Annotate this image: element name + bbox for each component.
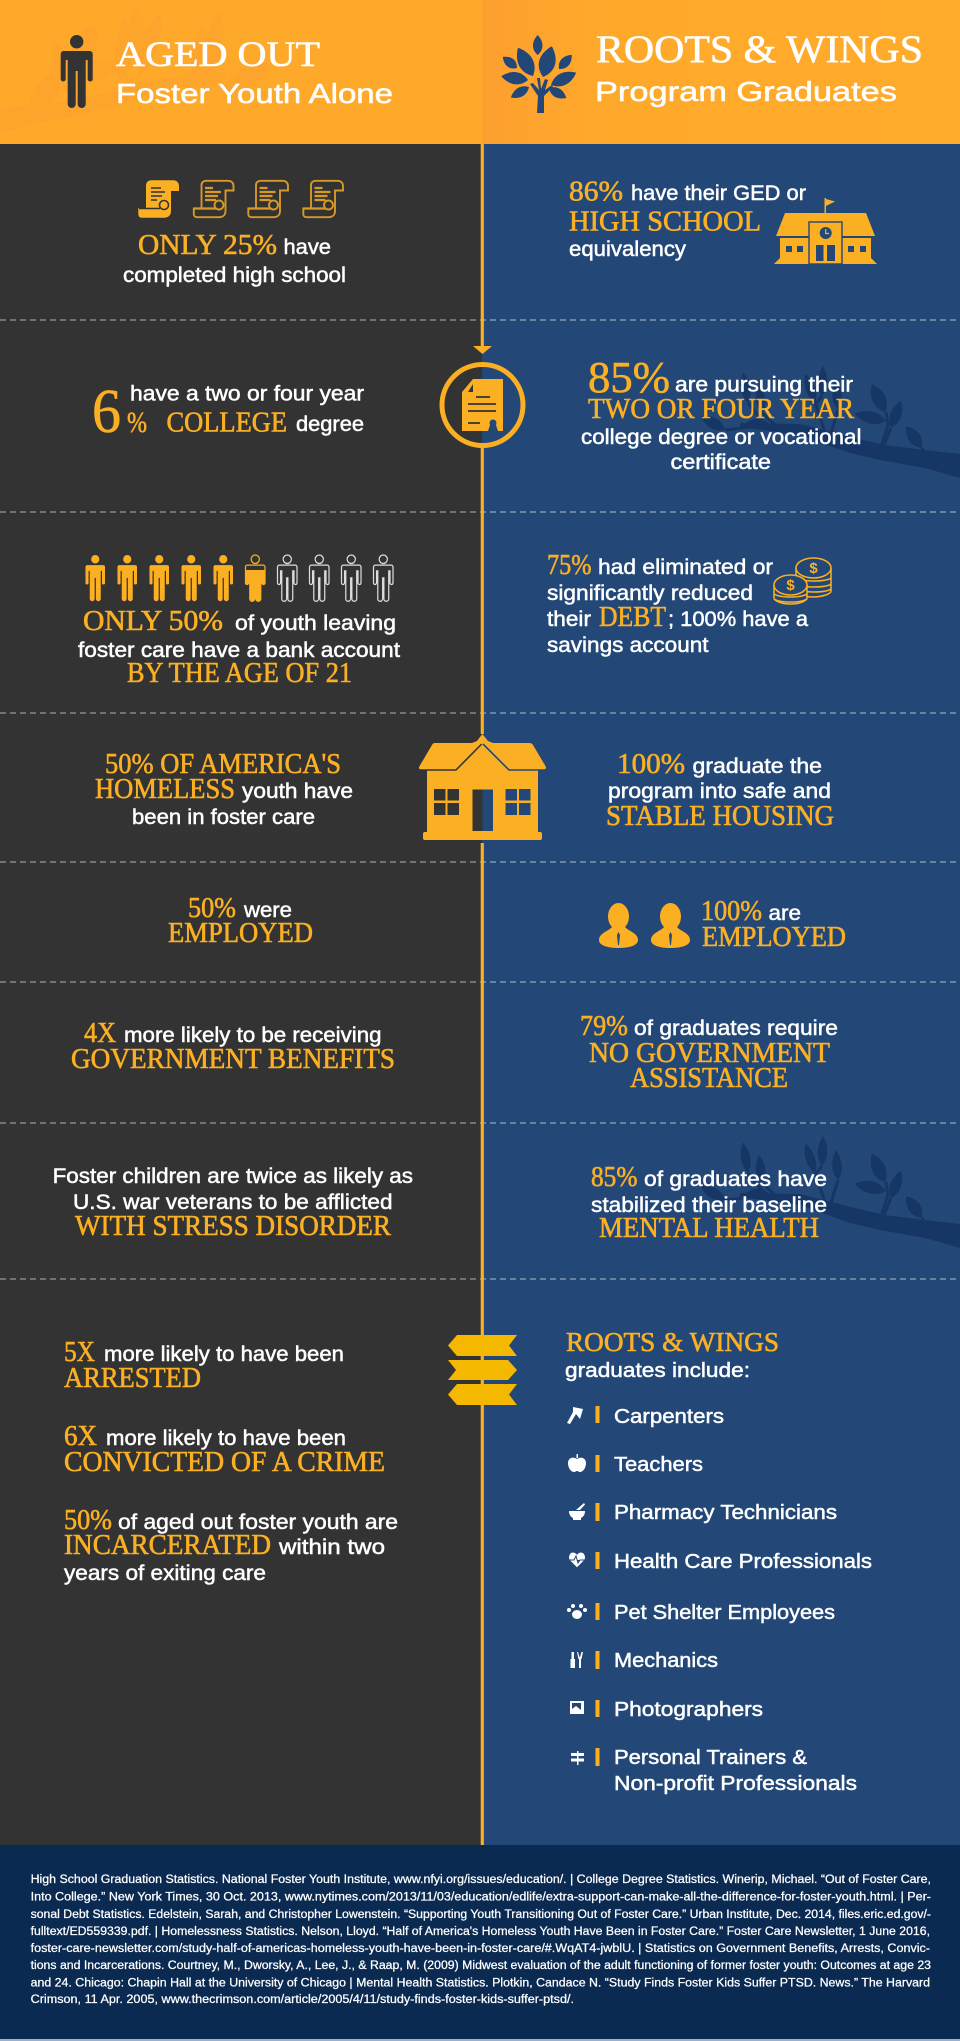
list text: Health Care Professionals [614, 1550, 872, 1573]
text: 50% incarcerated: 50% [64, 1505, 112, 1536]
footer: sources text: foster-care-newsletter.com/study-half-of-americas-homeless-youth-have-been-in-foster-care/#.WqAT4-jwblU. | Statistics on Government Benefits, Arrests, Convic- [31, 1943, 930, 1955]
text: 50% incarcerated: within two [278, 1536, 385, 1559]
text: 100% employed: EMPLOYED [702, 922, 846, 953]
icon: coin stacks [774, 558, 831, 604]
text: 85% mental health: MENTAL HEALTH [599, 1213, 819, 1244]
text: 6% college degree: have a two or four year [130, 382, 364, 406]
dashed dividers [0, 320, 960, 1279]
text: only 25% completed high school: ONLY 25% [138, 230, 277, 261]
footer: sources text: High School Graduation Statistics. National Foster Youth Institute, www.nfyi.org/issues/education/. | College Degree Statistics. Winerip, Michael. “Out of Foster Care, [31, 1874, 931, 1886]
text: 50% incarcerated: INCARCERATED [64, 1530, 271, 1561]
text: 75% eliminated debt: savings account [547, 634, 709, 657]
list text: Mechanics [614, 1649, 718, 1672]
icon: coin stacks: $ [786, 577, 795, 594]
text: stress disorder: U.S. war veterans to be afflicted [73, 1191, 392, 1214]
text: 75% eliminated debt: significantly reduced [547, 582, 753, 605]
text: only 50% bank account: foster care have a bank account [78, 639, 400, 662]
icon: signpost arrows [448, 1335, 517, 1405]
panel: right blue background [482, 144, 960, 1845]
text: 50% incarcerated: years of exiting care [64, 1562, 266, 1585]
text: 50% employed: 50% [188, 893, 236, 924]
bars: orange separators [596, 1406, 600, 1766]
footer: sources text [31, 1874, 931, 2006]
text: 5X arrested [64, 1337, 344, 1394]
text: 50% incarcerated: of aged out foster youth are [118, 1511, 398, 1534]
icon: two business people [599, 903, 690, 948]
text: 86% GED: equivalency [569, 238, 687, 261]
icon: school building [774, 198, 877, 264]
list text: Pet Shelter Employees [614, 1601, 835, 1624]
text: 4X government benefits [71, 1018, 395, 1075]
icon: blue tree [500, 35, 579, 113]
header: left orange panel [0, 0, 482, 144]
text: 50% homeless: HOMELESS [95, 774, 235, 805]
text: 4X government benefits: 4X [84, 1018, 116, 1049]
text: 6% college degree: 6 [92, 378, 121, 446]
list text: Photographers [614, 1698, 763, 1721]
text: 85% pursuing degree: 85% [588, 353, 670, 402]
heading: Aged Out [116, 34, 393, 109]
center timeline line [481, 144, 484, 1845]
text: 4X government benefits: GOVERNMENT BENEFITS [71, 1044, 395, 1075]
heading: graduates include: ROOTS & WINGS [566, 1327, 779, 1357]
icon: mortar and pestle [569, 1503, 585, 1520]
text: 85% mental health: 85% [591, 1162, 638, 1193]
text: 75% eliminated debt: their [547, 608, 591, 631]
text: 85% pursuing degree: are pursuing their [675, 374, 853, 396]
text: only 25% completed high school: have [284, 236, 331, 259]
footer: sources text: Crimson, 11 Apr. 2005, www.thecrimson.com/article/2005/4/11/study-finds-foster-kids-suffer-ptsd/. [31, 1994, 574, 2006]
text: 50% employed: EMPLOYED [168, 918, 313, 949]
footer: sources text: Into College.” New York Times, 30 Oct. 2013, www.nytimes.com/2013/11/03/education/edlife/extra-support-can-make-all-the-difference-for-foster-youth.html. | Per- [31, 1892, 931, 1904]
text: 86% GED [569, 176, 806, 261]
footer: background [0, 1845, 960, 2039]
text: 6% college degree [92, 378, 364, 446]
text: 85% mental health: stabilized their baseline [591, 1194, 827, 1217]
text: stress disorder: WITH STRESS DISORDER [75, 1211, 391, 1242]
text: 100% employed: 100% [701, 896, 762, 927]
text: 100% stable housing: STABLE HOUSING [606, 801, 834, 832]
text: 86% GED: 86% [569, 176, 623, 208]
heading: Aged Out: AGED OUT [116, 34, 320, 74]
icon: four diploma scrolls [139, 181, 343, 217]
text: 5X arrested: 5X [64, 1337, 95, 1368]
footer: sources text: tions and Incarcerations. Courtney, M., Dworsky, A., Lee, J., & Raap, M. (2009) Midwest evaluation of the adult functioning of former foster youth: Outcomes at age 23 [31, 1960, 931, 1972]
text: 75% eliminated debt [547, 550, 808, 657]
icon: arrow pointing to certificate [473, 346, 492, 354]
text: only 25% completed high school: completed high school [123, 264, 346, 287]
text: 79% no government assistance: of graduates require [634, 1017, 838, 1040]
decorative branch: right panel upper [698, 366, 960, 478]
icon: signpost [571, 1751, 584, 1765]
text: 79% no government assistance [580, 1011, 838, 1094]
text: 100% employed [701, 896, 846, 953]
icon: picture [570, 1701, 584, 1714]
text: 50% incarcerated [64, 1505, 398, 1585]
footer: bottom strip [0, 2039, 960, 2041]
text: 6% college degree: degree [296, 413, 364, 436]
icon: coin stacks: $ [809, 560, 818, 577]
heading: Roots and Wings: ROOTS & WINGS [596, 28, 923, 71]
text: 100% stable housing: program into safe and [608, 780, 831, 803]
text: 50% employed: were [243, 899, 292, 922]
list text: Carpenters [614, 1405, 724, 1428]
text: 6X convicted: 6X [64, 1421, 97, 1452]
text: 86% GED: have their GED or [631, 182, 806, 205]
footer: sources text: fulltext/ED559339.pdf. | Homelessness Statistics. Nelson, Lloyd. “Half of America's Homeless Youth Have Been in Foster Care.” Foster Care Newsletter, 1 June 2016, [31, 1926, 930, 1938]
text: 100% employed: are [768, 902, 801, 925]
text: 85% mental health [591, 1162, 827, 1244]
text: 6X convicted: CONVICTED OF A CRIME [64, 1447, 385, 1478]
list text: Personal Trainers & [614, 1746, 807, 1769]
text: 75% eliminated debt: had eliminated or [598, 556, 773, 579]
list text: Pharmacy Technicians [614, 1501, 837, 1524]
text: 50% homeless: been in foster care [132, 806, 315, 829]
text: 6X convicted: more likely to have been [106, 1427, 346, 1450]
list text [614, 1405, 872, 1795]
icon: ten people pictogram, five and a half filled [86, 555, 393, 601]
heading: Aged Out: Foster Youth Alone [116, 78, 393, 109]
text: only 50% bank account: BY THE AGE OF 21 [127, 658, 352, 689]
icon: tools [570, 1652, 583, 1668]
panel: left dark background [0, 144, 482, 1845]
text: 5X arrested: more likely to have been [104, 1343, 344, 1366]
text: stress disorder: Foster children are twice as likely as [53, 1165, 413, 1188]
text: 50% homeless [95, 749, 353, 829]
icon: paw [567, 1604, 587, 1619]
icon: heartbeat [569, 1552, 585, 1568]
footer: sources text: sonal Debt Statistics. Edelstein, Sarah, and Christopher Lowenstein. “Supporting Youth Transitioning Out of Foster Care.” Urban Institute, Dec. 2014, files.eric.ed.gov/- [31, 1909, 931, 1921]
text: 100% stable housing [606, 749, 834, 832]
icon: house [419, 734, 546, 840]
text: 85% pursuing degree: certificate [670, 451, 771, 474]
text: stress disorder [53, 1165, 413, 1242]
list text: Teachers [614, 1453, 703, 1476]
list text: Non-profit Professionals [614, 1772, 857, 1795]
text: only 50% bank account: ONLY 50% [83, 606, 223, 637]
text: 4X government benefits: more likely to be receiving [124, 1024, 382, 1047]
icon: certificate in circle [442, 364, 523, 446]
text: 86% GED: HIGH SCHOOL [569, 206, 761, 238]
text: 100% stable housing: graduate the [692, 755, 822, 778]
heading: graduates include [565, 1327, 779, 1382]
text: 75% eliminated debt: 75% [547, 550, 592, 581]
text: only 25% completed high school [123, 230, 346, 287]
header: right orange panel [482, 0, 960, 144]
list: graduate professions [567, 1405, 872, 1795]
heading: Roots and Wings [595, 28, 923, 107]
icon: axe [567, 1407, 583, 1424]
heading: graduates include: graduates include: [565, 1359, 750, 1382]
text: 85% pursuing degree [581, 353, 862, 474]
text: 79% no government assistance: ASSISTANCE [630, 1063, 788, 1094]
text: 75% eliminated debt: DEBT [599, 602, 666, 633]
text: 85% pursuing degree: college degree or vocational [581, 426, 862, 449]
text: 100% stable housing: 100% [617, 749, 685, 780]
footer: sources text: and 24. Chicago: Chapin Hall at the University of Chicago | Mental Health Statistics. Plotkin, Candace N. “Study Finds Foster Kids Suffer PTSD. News.” The Harvard [31, 1978, 930, 1990]
text: 79% no government assistance: NO GOVERNMENT [589, 1038, 830, 1069]
icon: standing person [61, 35, 93, 108]
text: 85% mental health: of graduates have [644, 1168, 827, 1191]
text: 6% college degree: % [127, 406, 147, 439]
decorative branch: right panel lower [698, 1136, 960, 1248]
text: only 50% bank account: of youth leaving [235, 612, 396, 635]
heading: Roots and Wings: Program Graduates [595, 76, 897, 107]
text: 6X convicted [64, 1421, 385, 1478]
text: 5X arrested: ARRESTED [64, 1363, 201, 1394]
text: 50% homeless: youth have [242, 780, 353, 803]
text: 6% college degree: COLLEGE [166, 408, 287, 438]
text: only 50% bank account [78, 606, 400, 689]
decorative branch: header [0, 21, 262, 133]
text: 50% employed [168, 893, 313, 949]
text: 50% homeless: 50% OF AMERICA'S [105, 749, 341, 780]
text: 79% no government assistance: 79% [580, 1011, 628, 1042]
icon: apple [568, 1454, 586, 1472]
text: 75% eliminated debt: ; 100% have a [668, 608, 808, 631]
text: 85% pursuing degree: TWO OR FOUR YEAR [588, 394, 854, 425]
